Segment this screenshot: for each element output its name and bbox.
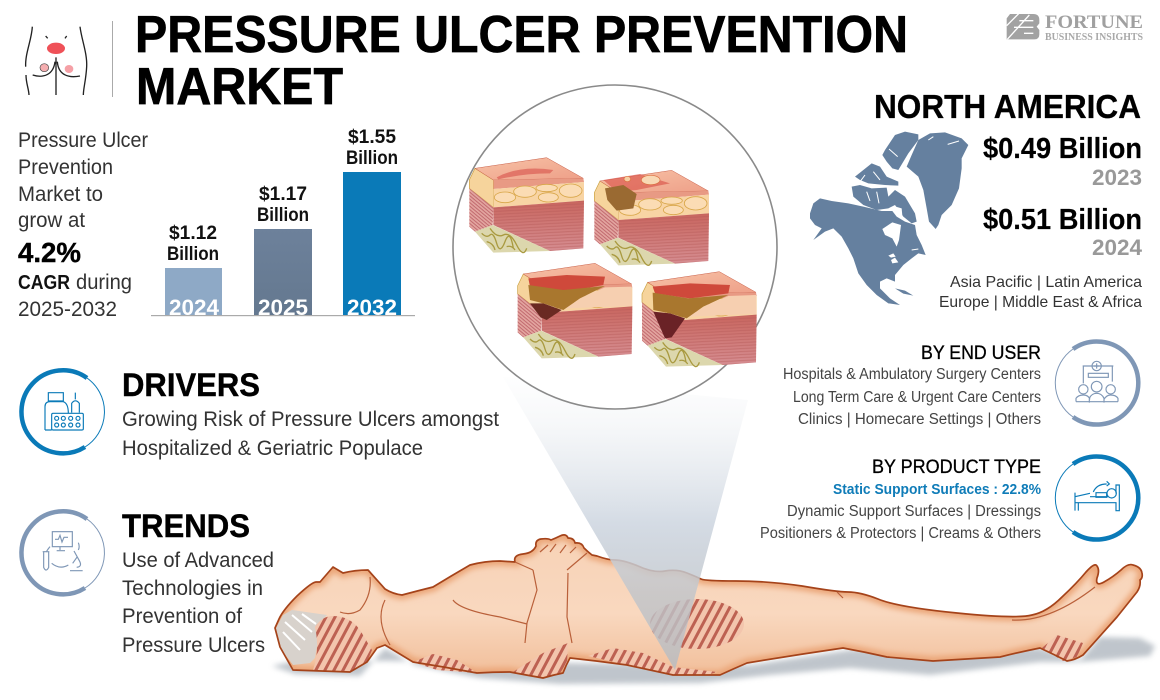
magnified circle xyxy=(453,85,777,409)
patient body illustration xyxy=(275,535,1142,678)
pressure zone: shoulder xyxy=(413,654,477,673)
text block: by product type xyxy=(760,456,1041,542)
pressure zone: hip xyxy=(650,599,744,649)
heading and text: trends: Prevention of xyxy=(122,605,242,628)
ulcer stage 3 block xyxy=(518,263,632,358)
logo xyxy=(1007,12,1143,43)
pressure zone: elbow xyxy=(513,643,568,678)
regional figures: Europe | Middle East & Africa xyxy=(939,294,1142,311)
bar 2025: Billion xyxy=(257,204,309,226)
arm and body contour lines xyxy=(340,544,1095,645)
ulcer stage 4 block xyxy=(642,272,757,367)
text block: by product type: Positioners & Protectors | Creams & Others xyxy=(760,525,1041,542)
title: MARKET xyxy=(136,58,343,116)
bar 2032: 2032 xyxy=(347,295,397,320)
bar chart xyxy=(151,126,415,320)
heading and text: trends: Pressure Ulcers xyxy=(122,634,265,657)
bar 2032: $1.55 xyxy=(348,126,396,148)
arctic islands xyxy=(852,132,918,223)
body outline xyxy=(275,535,1142,678)
inner skin shading xyxy=(275,535,1142,678)
heading and text: drivers: Hospitalized & Geriatric Populace xyxy=(122,437,423,460)
mainland xyxy=(810,198,926,305)
greenland xyxy=(907,132,968,229)
text block: by end user xyxy=(783,342,1041,428)
bar 2025 xyxy=(254,183,312,320)
icon: product type ring xyxy=(1055,456,1138,540)
regional figures: $0.51 Billion xyxy=(983,204,1142,236)
text block: CAGR: Pressure Ulcer xyxy=(18,129,148,152)
bar 2024 xyxy=(165,222,222,320)
text block: CAGR: Prevention xyxy=(18,156,113,179)
bar 2024: 2024 xyxy=(169,295,220,320)
logo: FORTUNE xyxy=(1045,12,1143,33)
icon: end user ring xyxy=(1055,342,1138,425)
heading and text: drivers xyxy=(122,367,499,460)
text block: by product type: BY PRODUCT TYPE xyxy=(872,456,1041,478)
bar 2032: Billion xyxy=(346,147,398,169)
heading and text: trends: TRENDS xyxy=(122,508,250,544)
bar 2024: Billion xyxy=(167,243,219,265)
ulcer stage 1 block xyxy=(469,158,584,253)
magnifier cone xyxy=(503,377,748,670)
icon: drivers ring xyxy=(21,370,104,453)
text block: by product type: Dynamic Support Surfaces | Dressings xyxy=(787,503,1041,520)
text block: CAGR: Market to xyxy=(18,183,103,206)
title: PRESSURE ULCER PREVENTION xyxy=(135,6,908,64)
body shadow xyxy=(272,637,1155,684)
text block: by product type: Static Support Surfaces : 22.8% xyxy=(833,482,1041,498)
text block: by end user: Clinics | Homecare Settings | Others xyxy=(798,411,1041,428)
text block: CAGR: during xyxy=(76,271,132,294)
text block: by end user: Hospitals & Ambulatory Surgery Centers xyxy=(783,366,1041,383)
heading and text: drivers: DRIVERS xyxy=(122,367,260,403)
icon: trends ring xyxy=(21,511,104,594)
hudson bay, inlets and great lakes xyxy=(860,137,959,263)
hair xyxy=(276,610,327,665)
cuba and caribbean xyxy=(895,288,913,296)
pressure zone: head xyxy=(313,616,372,672)
pressure zone: heel xyxy=(1042,635,1083,661)
pressure zone: back xyxy=(588,648,717,675)
text block: by end user: BY END USER xyxy=(921,342,1041,364)
title xyxy=(135,6,908,116)
bar 2032 xyxy=(343,126,401,320)
bar 2025: $1.17 xyxy=(259,183,307,205)
regional figures: Asia Pacific | Latin America xyxy=(950,274,1142,291)
heading and text: trends: Use of Advanced xyxy=(122,549,274,572)
text block: CAGR xyxy=(18,129,148,321)
heading and text: trends: Technologies in xyxy=(122,577,263,600)
regional figures: 2024 xyxy=(1092,235,1143,260)
bar 2024: $1.12 xyxy=(169,222,217,244)
ulcer stage 2 block xyxy=(594,170,709,265)
heading and text: drivers: Growing Risk of Pressure Ulcers amongst xyxy=(122,408,499,431)
icon: pressure points on torso xyxy=(26,27,87,95)
heading and text: trends xyxy=(122,508,274,657)
text block: CAGR: 2025-2032 xyxy=(18,298,117,321)
text block: CAGR: grow at xyxy=(18,209,85,232)
map: north america xyxy=(810,132,968,305)
regional figures: $0.49 Billion xyxy=(983,133,1142,165)
heading: north america: NORTH AMERICA xyxy=(874,88,1141,125)
logo: BUSINESS INSIGHTS xyxy=(1045,32,1143,43)
regional figures xyxy=(939,133,1143,311)
text block: CAGR: 4.2% xyxy=(18,237,81,268)
text block: CAGR: CAGR xyxy=(18,272,70,294)
text block: by end user: Long Term Care & Urgent Care Centers xyxy=(793,389,1041,406)
regional figures: 2023 xyxy=(1092,165,1142,190)
bar 2025: 2025 xyxy=(258,295,308,320)
